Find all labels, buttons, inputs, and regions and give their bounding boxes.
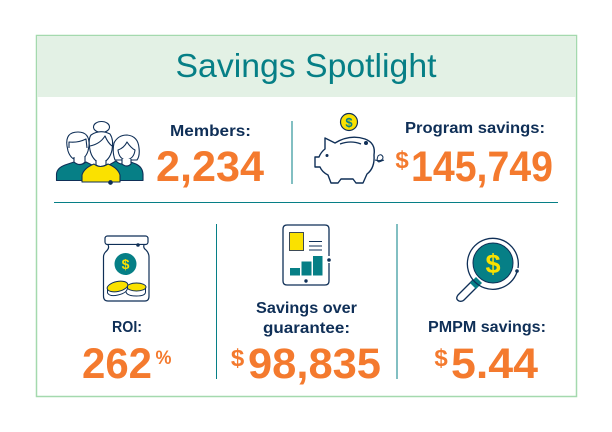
icon: jar with coins — [104, 236, 149, 301]
savings over guarantee label: Savings over — [256, 300, 357, 317]
icon: piggy bank with coin: $ — [345, 115, 353, 130]
icon: piggy bank with coin — [315, 114, 384, 183]
pmpm savings value: $ — [434, 345, 448, 372]
program savings label: Program savings: — [405, 120, 545, 137]
savings over guarantee label — [256, 300, 357, 337]
divider — [216, 224, 217, 379]
icon: tablet with chart — [283, 225, 331, 285]
savings over guarantee value: $ — [231, 345, 245, 372]
members label: Members: — [170, 123, 251, 140]
icon: jar with coins: $ — [122, 256, 130, 272]
title: Savings Spotlight — [176, 47, 436, 84]
icon: magnifying glass with dollar — [457, 238, 519, 301]
program savings value: $ — [395, 147, 409, 174]
icon: three people — [56, 122, 143, 184]
savings over guarantee label: guarantee: — [263, 320, 350, 337]
header band — [37, 36, 576, 97]
pmpm savings label: PMPM savings: — [428, 319, 546, 336]
divider — [292, 121, 293, 184]
roi value: 262 — [82, 340, 152, 388]
divider — [396, 224, 398, 379]
savings over guarantee value: 98,835 — [248, 340, 381, 388]
divider — [54, 202, 558, 203]
pmpm savings value: 5.44 — [451, 340, 538, 388]
roi label: ROI: — [112, 319, 142, 336]
program savings value: 145,749 — [411, 143, 553, 191]
icon: magnifying glass with dollar: $ — [485, 249, 501, 279]
roi value: % — [156, 348, 172, 369]
panel: savings spotlight frame — [36, 36, 576, 396]
members value: 2,234 — [156, 143, 264, 191]
